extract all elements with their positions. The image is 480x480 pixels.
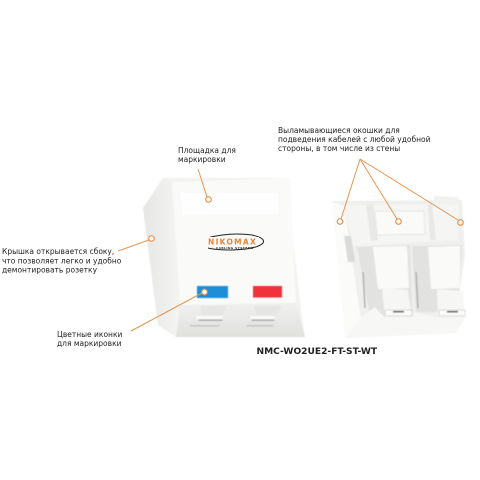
heading text: marking area: Площадка для [178,146,236,155]
left wall [332,201,362,338]
front face [172,178,296,305]
label area [180,193,279,215]
logo: NIKOMAX: NIKOMAX [208,238,257,246]
module clips [385,310,465,316]
icon: red label [253,286,282,298]
callout: side cover pointer [118,236,154,251]
text block: side-opening cover: демонтировать розетку [2,266,98,274]
top inner shelf [345,204,459,246]
right device: open socket interior [332,196,465,338]
text block: knockout windows: подведения кабелей с любой удобной [278,135,431,144]
lower lip [345,307,465,338]
callout: marking area pointer [198,169,211,202]
left device: closed wall socket [143,178,305,337]
keystone modules [373,246,409,289]
callout: colour icons pointer [131,289,207,331]
icon: blue label [197,286,228,298]
module bays [357,245,412,316]
device body [143,178,305,337]
text block: side-opening cover: что позволяет легко и удобно [2,256,122,266]
heading text: marking area: маркировки [178,155,226,164]
logo: NIKOMAX [206,234,264,250]
logo: NIKOMAX: CABLING SYSTEMS [216,246,254,250]
device base [332,200,465,338]
text block: colour icons: Цветные иконки [57,330,122,339]
text block: side-opening cover: Крышка открывается сбоку, [2,247,114,256]
text block: knockout windows: Выламывающиеся окошки для [278,126,400,135]
lower front recess [176,303,305,337]
side wall [143,178,180,337]
text block: knockout windows: стороны, в том числе из стены [278,144,400,153]
text block: colour icons: для маркировки [57,339,122,348]
port flaps [200,306,282,316]
callout: knockout windows pointers [337,159,463,225]
knockout window [375,211,425,235]
product model number: NMC-WO2UE2-FT-ST-WT [256,347,378,357]
